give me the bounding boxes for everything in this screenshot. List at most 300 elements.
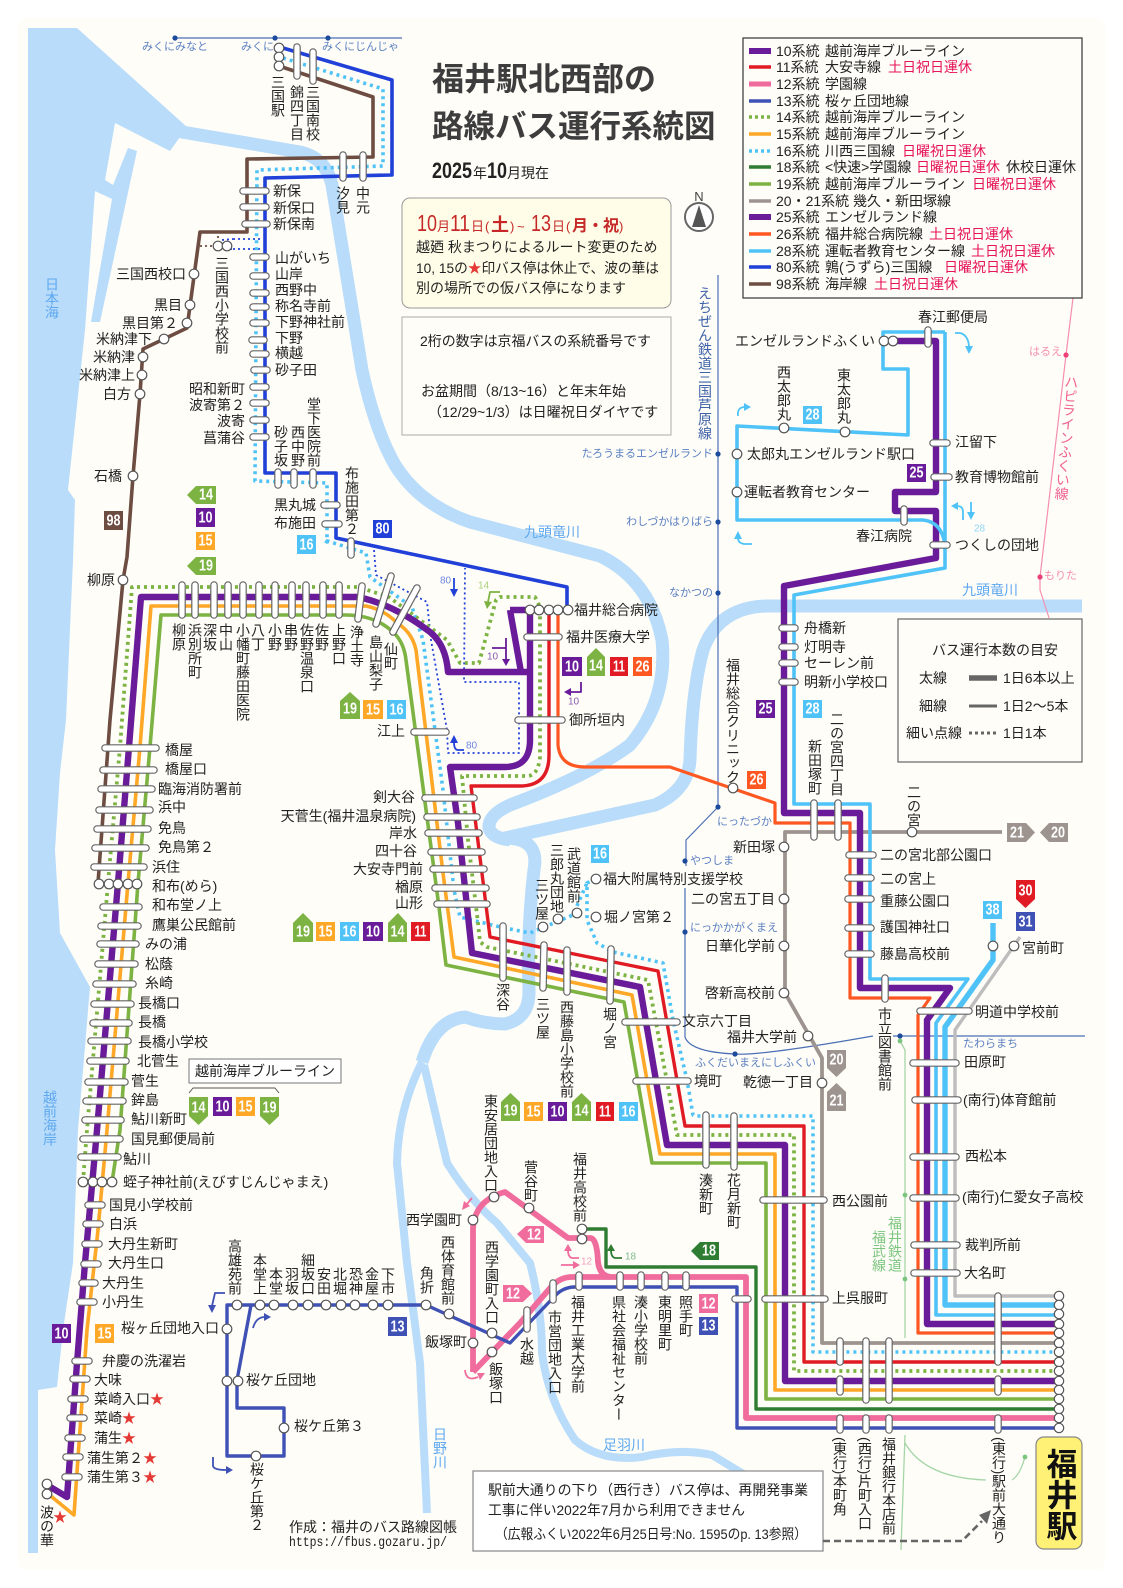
- route 80 dotted branches: [222, 239, 519, 753]
- stop labels: west coast corridor: 橋屋: [165, 742, 193, 758]
- route badges: north and coast: 10: [54, 1326, 69, 1342]
- legend: route list: <快速>学園線: [825, 159, 911, 175]
- stop labels: Sakuragaoka line 13: 県社会福祉センター: [611, 1295, 627, 1421]
- stop labels: Harue and Angel Land area: 新田塚町: [807, 739, 823, 795]
- date: as of October 2025: 2025: [432, 158, 472, 183]
- legend: route list: 80系統: [776, 259, 820, 275]
- stop labels: Sakuragaoka line 13: 桜ヶ丘団地入口: [121, 1320, 219, 1336]
- route badges: east side: 21: [1010, 824, 1024, 842]
- stop labels: Mikuni and Shinbo area: 新保口: [273, 200, 315, 216]
- stop labels: west coast corridor: 菜崎入口★: [94, 1391, 164, 1407]
- stop labels: west coast corridor: 蒲生第３★: [87, 1469, 157, 1485]
- route 16 dotted: [255, 58, 1055, 1352]
- stop labels: Mikuni and Shinbo area: 山がいち: [275, 250, 331, 266]
- stop labels: east corridor to Fukui Station: 西松本: [965, 1148, 1007, 1164]
- date: as of October 2025: [432, 158, 549, 183]
- stop labels: Mikuni and Shinbo area: 山岸: [275, 266, 303, 282]
- stop labels: Mikuni and Shinbo area: 黒目第２: [122, 315, 178, 331]
- stop labels: Sakuragaoka line 13: 東安居団地入口: [483, 1094, 499, 1192]
- route badges: north and coast: 15: [98, 1326, 112, 1342]
- stop labels: east corridor to Fukui Station: 大名町: [964, 1265, 1006, 1281]
- stop labels: west coast corridor: 鮎川新町: [131, 1111, 187, 1127]
- stop labels: east corridor to Fukui Station: 新田塚: [733, 839, 775, 855]
- stop labels: west coast corridor: 蒲生第２★: [87, 1450, 157, 1466]
- notice panel: route change October 11-13: ): [510, 219, 514, 234]
- route badges: Eshima corridor clusters: [293, 648, 652, 942]
- stop labels: top horizontal corridor: [171, 602, 658, 911]
- stop labels: Mikuni and Shinbo area: 波寄: [217, 413, 245, 429]
- callout: Echizen Coast Blue Line: 10: [216, 1098, 230, 1116]
- railway: Echizen Mikuni-Awara line: にったづか: [717, 815, 772, 828]
- legend: service frequency: バス運行本数の目安: [932, 642, 1058, 658]
- route badges: Eshima corridor clusters: 14: [390, 924, 405, 940]
- stop labels: Sakuragaoka line 13: 湊小学校前: [633, 1295, 649, 1366]
- route badges: center and south: 12: [702, 1296, 716, 1312]
- stop labels: Harue and Angel Land area: 福井総合クリニック: [725, 658, 741, 784]
- stop labels: east corridor to Fukui Station: 重藤公園口: [880, 893, 950, 909]
- river and sea names: 日野川: [432, 1427, 448, 1469]
- stop labels: central corridor: 堀ノ宮: [602, 1007, 618, 1049]
- route badges: center and south: 16: [593, 846, 607, 862]
- stop labels: east corridor to Fukui Station: (南行)体育館前: [963, 1092, 1056, 1108]
- callout: Echizen Coast Blue Line: 15: [238, 1098, 253, 1116]
- stop labels: Harue and Angel Land area: 西太郎丸: [776, 365, 792, 422]
- route badges: center and south: 12: [506, 1286, 520, 1302]
- stop labels: top horizontal corridor: 八丁: [250, 623, 266, 651]
- stop labels: Sakuragaoka line 13: 福井工業大学前: [570, 1295, 586, 1394]
- stop labels: Harue and Angel Land area: つくしの団地: [955, 537, 1039, 553]
- stop labels: Sakuragaoka line 13: 恐神: [348, 1267, 364, 1295]
- route badges: center and south: 10: [550, 1104, 565, 1120]
- legend: route list: 休校日運休: [1006, 159, 1076, 175]
- route badges: east side: 25: [910, 464, 924, 482]
- stop labels: Mikuni and Shinbo area: 柳原: [87, 572, 115, 588]
- stop labels: west coast corridor: 小丹生: [102, 1294, 144, 1310]
- stop labels: central corridor: [495, 843, 888, 1306]
- railway: Hapi-line Fukui: ハピラインふくい線: [1053, 374, 1080, 502]
- stop labels: Mikuni and Shinbo area: 三国駅: [270, 75, 286, 117]
- stop labels: Sakuragaoka line 13: 市営団地入口: [547, 1310, 563, 1394]
- stop labels: Harue and Angel Land area: 教育博物館前: [955, 469, 1039, 485]
- route badges: Eshima corridor clusters: 14: [589, 658, 603, 674]
- legend: service frequency: 1日6本以上: [1003, 670, 1075, 686]
- stop labels: west coast corridor: 大丹生新町: [108, 1236, 178, 1252]
- stop labels: west coast corridor: 免鳥: [158, 820, 186, 836]
- route badges: center and south: 12: [527, 1226, 541, 1244]
- route badges: Eshima corridor clusters: 16: [390, 702, 404, 718]
- legend: route list: 越前海岸ブルーライン: [825, 126, 965, 142]
- title: 福井駅北西部の: [432, 61, 656, 97]
- Fukui Station box: [1036, 1437, 1082, 1549]
- stop labels: west coast corridor: 蒲生★: [94, 1430, 136, 1446]
- stop labels: central corridor: 深谷: [495, 983, 511, 1011]
- date: as of October 2025: 年: [473, 165, 487, 181]
- route badges: center and south: 11: [599, 1104, 611, 1120]
- notice panel: route change October 11-13: 土: [491, 215, 509, 235]
- railway: Fukui Railway Fukubu line: 福井鉄道: [887, 1216, 903, 1273]
- credit: [289, 1519, 457, 1551]
- stop labels: west coast corridor: 国見小学校前: [109, 1197, 193, 1213]
- legend: route list: 26系統: [776, 226, 820, 242]
- notice panel: route change October 11-13: ): [619, 219, 623, 234]
- stop labels: Sakuragaoka line 13: 本堂: [268, 1267, 284, 1295]
- Fukui Station box: 福井駅: [1042, 1448, 1077, 1541]
- legend: route list: 16系統: [776, 143, 820, 159]
- route badges: east side: 30: [1018, 882, 1033, 900]
- stop labels: top horizontal corridor: 仙町: [383, 642, 399, 670]
- stop labels: east corridor to Fukui Station: 啓新高校前: [705, 985, 775, 1001]
- stop labels: Harue and Angel Land area: 春江病院: [856, 528, 912, 544]
- stop labels: west coast corridor: 長橋小学校: [138, 1034, 208, 1050]
- stop labels: Mikuni and Shinbo area: 布施田第２: [344, 466, 360, 536]
- stop labels: west coast corridor: 和布堂ノ上: [152, 897, 222, 913]
- stop labels: Mikuni and Shinbo area: 黒丸城: [274, 497, 316, 513]
- stop labels: top horizontal corridor: 四十谷: [375, 843, 417, 859]
- stop labels: Harue and Angel Land area: 明新小学校口: [804, 674, 888, 690]
- stop labels: top horizontal corridor: 小野: [267, 623, 283, 651]
- railway: Echizen Mikuni-Awara line: なかつの: [669, 586, 713, 599]
- stop labels: east corridor to Fukui Station: 田原町: [964, 1054, 1006, 1070]
- stop labels: Sakuragaoka line 13: 安田: [316, 1267, 332, 1295]
- route badges: Eshima corridor clusters: 11: [613, 658, 625, 676]
- legend: route list: 15系統: [776, 126, 820, 142]
- railway: Echizen Mikuni-Awara line: たわらまち: [963, 1037, 1018, 1050]
- route badges: east side: 25: [758, 700, 773, 718]
- legend: route list: 20・21系統: [776, 193, 849, 209]
- route badges: east side: 31: [1018, 914, 1033, 930]
- legend: service frequency: 細い点線: [906, 725, 962, 741]
- direction arrows: 14: [478, 580, 490, 592]
- legend: route list: エンゼルランド線: [825, 209, 937, 225]
- notice panel: route change October 11-13: 別の場所での仮バス停になります: [416, 280, 626, 296]
- stop labels: top horizontal corridor: 佐野: [314, 623, 330, 651]
- route badges: Eshima corridor clusters: 10: [366, 924, 380, 940]
- stop labels: west coast corridor: みの浦: [145, 936, 187, 952]
- stop labels: Sakuragaoka line 13: 飯塚町: [425, 1334, 467, 1350]
- stop labels: east corridor to Fukui Station: 明道中学校前: [975, 1004, 1059, 1020]
- stop labels: Mikuni and Shinbo area: 西野中: [275, 282, 317, 298]
- river and sea names: 九頭竜川: [524, 524, 580, 540]
- stop labels: Sakuragaoka line 13: 西体育館前: [440, 1235, 456, 1306]
- stop labels: top horizontal corridor: 山形: [395, 895, 423, 911]
- stop labels: Sakuragaoka line 13: 本堂上: [252, 1253, 268, 1295]
- river and sea names: 足羽川: [603, 1437, 645, 1453]
- stop labels: west coast corridor: 鉾島: [131, 1092, 159, 1108]
- arrow: dashed pointer to Ekimae-odori: [823, 1510, 991, 1541]
- stop labels: Harue and Angel Land area: 二の宮四丁目: [829, 712, 845, 796]
- legend: route list: 幾久・新田塚線: [853, 193, 951, 209]
- route badges: north and coast: 98: [106, 512, 121, 530]
- route 26 orange-red: [558, 610, 1055, 1333]
- route badges: north and coast: 80: [376, 520, 390, 538]
- stop labels: east corridor to Fukui Station: 藤島高校前: [880, 946, 950, 962]
- stop labels: Sakuragaoka line 13: 桜ケ丘団地: [246, 1372, 316, 1388]
- stop labels: Harue and Angel Land area: 灯明寺: [804, 639, 846, 655]
- legend: route list: 越前海岸ブルーライン: [825, 43, 965, 59]
- stop labels: east corridor to Fukui Station: 護国神社口: [880, 919, 950, 935]
- stop labels: top horizontal corridor: 浄土寺: [349, 625, 365, 667]
- stop labels: Sakuragaoka line 13: 細坂口: [300, 1253, 316, 1295]
- notice panel: route change October 11-13: 10: [417, 210, 437, 236]
- route badges: north and coast: [52, 486, 392, 1343]
- stop labels: Sakuragaoka line 13: 金屋: [364, 1267, 380, 1296]
- route badges: Eshima corridor clusters: 15: [318, 924, 333, 940]
- stop labels: east corridor to Fukui Station: 福井銀行本店前: [881, 1437, 897, 1536]
- stop labels: west coast corridor: ★: [53, 1509, 67, 1525]
- route 13 indigo: [227, 1287, 1055, 1456]
- legend: route list: 学園線: [825, 76, 867, 92]
- route badges: north and coast: 16: [300, 536, 314, 554]
- stop labels: central corridor: 西藤島小学校前: [559, 1000, 575, 1099]
- legend: route list: 土日祝日運休: [874, 276, 958, 292]
- stop labels: top horizontal corridor: 浜別所町: [187, 623, 203, 679]
- stop labels: top horizontal corridor: 佐野温泉口: [299, 623, 315, 693]
- stop labels: Mikuni and Shinbo area: 石橋: [94, 468, 122, 484]
- stop labels: Sakuragaoka line 13: 西学園町入口: [484, 1240, 500, 1324]
- route badges: center and south: 19: [504, 1102, 518, 1120]
- legend: route list: 14系統: [776, 109, 820, 125]
- credit: https://fbus.gozaru.jp/: [289, 1535, 447, 1551]
- stop labels: Mikuni and Shinbo area: 錦四丁目: [289, 84, 305, 141]
- stop labels: Harue and Angel Land area: 江留下: [955, 434, 997, 450]
- railway: Echizen Mikuni-Awara line: みくにみなと: [142, 40, 208, 53]
- railway: Hapi-line Fukui: もりた: [1044, 569, 1077, 582]
- legend: route list: 運転者教育センター線: [825, 243, 965, 259]
- railway: Echizen Mikuni-Awara line: えちぜん鉄道三国芦原線: [697, 286, 713, 440]
- direction arrows: 80: [466, 740, 478, 752]
- stop labels: Mikuni and Shinbo area: 米納津上: [79, 367, 135, 383]
- stop labels: east corridor to Fukui Station: 日華化学前: [705, 938, 775, 954]
- notice panel: route change October 11-13: 10, 15の★印バス停は休止で、波の華は: [416, 260, 659, 276]
- legend: service frequency: 太線: [919, 670, 947, 686]
- stop labels: Mikuni and Shinbo area: 黒目: [154, 297, 182, 313]
- callout: Echizen Coast Blue Line: 19: [262, 1100, 277, 1116]
- railway: Fukui Railway Fukubu line: 福武線: [871, 1230, 887, 1272]
- route badges: east side: 20: [1051, 824, 1065, 842]
- legend: route list: 10系統: [776, 43, 820, 59]
- stop labels: west coast corridor: 浜住: [152, 859, 180, 875]
- date: as of October 2025: 10: [487, 158, 507, 183]
- river and sea names: 越前海岸: [42, 1090, 58, 1146]
- stop labels: east corridor to Fukui Station: 二の宮上: [880, 871, 936, 887]
- stop labels: Mikuni and Shinbo area: 下野神社前: [275, 314, 345, 330]
- stop labels: Mikuni and Shinbo area: 布施田: [274, 515, 316, 531]
- legend: route list: [743, 38, 1082, 298]
- route badges: east side: 20: [830, 1052, 844, 1068]
- route badges: Eshima corridor clusters: 15: [366, 702, 380, 718]
- date: as of October 2025: 月現在: [507, 165, 549, 181]
- route badges: center and south: 18: [702, 1242, 716, 1260]
- stop labels: west coast corridor: 菅生: [131, 1073, 159, 1089]
- stop labels: Mikuni and Shinbo area: 横越: [275, 345, 303, 361]
- stop labels: top horizontal corridor: 串野: [283, 623, 299, 651]
- stop labels: Harue and Angel Land area: 春江郵便局: [918, 309, 988, 325]
- stop labels: Sakuragaoka line 13: 桜ケ丘第２: [249, 1462, 265, 1532]
- stop labels: top horizontal corridor: 御所垣内: [569, 712, 625, 728]
- stop labels: top horizontal corridor: 島山梨子: [368, 635, 384, 692]
- direction arrows: [208, 333, 986, 1474]
- stop labels: Mikuni and Shinbo area: 三国西校口: [116, 266, 186, 282]
- route 28 light blue: [737, 332, 1055, 1315]
- route badges: east side: 38: [986, 902, 1000, 918]
- route badges: Eshima corridor clusters: 11: [414, 924, 427, 940]
- railway: Echizen Mikuni-Awara line: わしづかはりばら: [626, 515, 713, 528]
- legend: route list: 鶉(うずら)三国線: [825, 259, 932, 275]
- callout: Echizen Coast Blue Line: 14: [192, 1100, 206, 1116]
- legend: route list: 13系統: [776, 93, 820, 109]
- notice panel: route change October 11-13: 月・祝: [572, 217, 619, 235]
- route 31 light gray: [955, 937, 1055, 1296]
- railway: Echizen Mikuni-Awara line: [142, 35, 1085, 1069]
- stop labels: Sakuragaoka line 13: 桜ケ丘第３: [294, 1418, 364, 1434]
- stop labels: west coast corridor: 波の華: [39, 1505, 55, 1547]
- river and sea names: [42, 277, 1018, 1469]
- route badges: center and south: [388, 845, 719, 1336]
- route badges: north and coast: 10: [198, 510, 213, 526]
- route badges: Eshima corridor clusters: 10: [565, 658, 579, 676]
- notice panel: Ekimae-odori stop closure: [473, 1471, 823, 1551]
- notice panel: route change October 11-13: 月: [437, 219, 450, 234]
- stop labels: Mikuni and Shinbo area: 砂子田: [275, 362, 317, 378]
- stop labels: west coast corridor: 蛭子神社前(えびすじんじゃまえ): [123, 1174, 328, 1190]
- legend: route list: 桜ヶ丘団地線: [825, 93, 909, 109]
- stop labels: top horizontal corridor: 天菅生(福井温泉病院): [281, 808, 416, 824]
- stop labels: Sakuragaoka line 13: 下市: [380, 1267, 396, 1295]
- legend: service frequency: 細線: [919, 698, 947, 714]
- notice panel: Ekimae-odori stop closure: 駅前大通りの下り（西行き）バス停は、再開発事業: [488, 1482, 808, 1498]
- legend: route list: 川西三国線: [825, 143, 895, 159]
- route 12 pink: [473, 1192, 1055, 1418]
- route 14 dotted green: [83, 587, 1055, 1371]
- stop labels: central corridor: 三郎丸団地: [549, 843, 565, 913]
- notice panel: route change October 11-13: 日: [471, 219, 484, 234]
- notice panel: Ekimae-odori stop closure: （広報ふくい2022年6月25日号:No. 1595のp. 13参照）: [495, 1526, 807, 1542]
- stop labels: east corridor to Fukui Station: 二の宮北部公園口: [880, 847, 992, 863]
- legend: route list: 海岸線: [825, 276, 867, 292]
- stop labels: east corridor to Fukui Station: 裁判所前: [965, 1237, 1021, 1253]
- stop labels: west coast corridor: 菜崎★: [94, 1410, 136, 1426]
- notice panel: route change October 11-13: 越廼 秋まつりによるルート変更のため: [416, 239, 657, 255]
- legend: route list: 12系統: [776, 76, 820, 92]
- stop labels: Sakuragaoka line 13: 西学園町: [406, 1212, 462, 1228]
- stop labels: Mikuni and Shinbo area: 白方: [103, 386, 131, 402]
- legend: route list: 19系統: [776, 176, 820, 192]
- stop labels: central corridor: 武道館前: [566, 847, 582, 904]
- route badges: east side: [747, 406, 1068, 1111]
- stop labels: central corridor: 西公園前: [832, 1193, 888, 1209]
- stop labels: Sakuragaoka line 13: 羽坂: [284, 1267, 300, 1295]
- stop labels: Mikuni and Shinbo area: 称名寺前: [275, 298, 331, 314]
- railway: Hapi-line Fukui: [1029, 298, 1080, 618]
- stop labels: top horizontal corridor: 剣大谷: [373, 789, 415, 805]
- stop labels: Harue and Angel Land area: 舟橋新: [804, 620, 846, 636]
- direction arrows: 10: [568, 696, 580, 708]
- stop labels: Mikuni and Shinbo area: 堂下医院前: [306, 397, 322, 468]
- stop labels: west coast corridor: 浜中: [158, 799, 186, 815]
- stop labels: central corridor: 三ツ屋: [534, 878, 550, 921]
- route badges: center and south: 16: [622, 1104, 636, 1120]
- legend: route list: 28系統: [776, 243, 820, 259]
- stop labels: east corridor to Fukui Station: 乾徳一丁目: [743, 1074, 813, 1090]
- route badges: north and coast: 14: [199, 486, 213, 504]
- stop labels: Harue and Angel Land area: 太郎丸エンゼルランド駅口: [747, 446, 915, 462]
- stop labels: west coast corridor: 免鳥第２: [158, 839, 214, 855]
- notice panel: route numbers and holiday schedule: お盆期間（8/13~16）と年末年始: [421, 383, 626, 399]
- stop labels: Sakuragaoka line 13: 高雄苑前: [227, 1238, 243, 1296]
- stop labels: Sakuragaoka line 13: 東明里町: [657, 1295, 673, 1351]
- route 11 red: [471, 610, 1055, 1362]
- stop labels: top horizontal corridor: 中山: [218, 623, 234, 651]
- legend: service frequency: 1日1本: [1003, 725, 1047, 741]
- stop labels: Mikuni and Shinbo area: [79, 75, 371, 588]
- route badges: center and south: 13: [390, 1318, 405, 1336]
- railway: Echizen Mikuni-Awara line: やつしま: [690, 854, 734, 867]
- legend: route list: 18系統: [776, 159, 820, 175]
- stop labels: west coast corridor: 大丹生: [102, 1275, 144, 1291]
- stop labels: Sakuragaoka line 13: 福井高校前: [572, 1152, 588, 1223]
- stop labels: west coast corridor: [39, 742, 328, 1547]
- stop labels: Sakuragaoka line 13: 飯塚口: [488, 1362, 504, 1404]
- route badges: Eshima corridor clusters: 16: [342, 924, 357, 940]
- notice panel: route change October 11-13: 13: [531, 210, 551, 236]
- route badges: east side: 28: [806, 700, 820, 718]
- stop labels: west coast corridor: 大味: [94, 1372, 122, 1388]
- callout: Echizen Coast Blue Line: 越前海岸ブルーライン: [195, 1063, 335, 1079]
- stop labels: Mikuni and Shinbo area: 昭和新町: [189, 381, 245, 397]
- direction arrows: 12: [581, 1256, 593, 1268]
- stop labels: west coast corridor: 白浜: [109, 1216, 137, 1232]
- route badges: Eshima corridor clusters: 26: [636, 658, 650, 676]
- stop labels: top horizontal corridor: 福井医療大学: [566, 629, 650, 645]
- stop labels: Mikuni and Shinbo area: 新保南: [273, 216, 315, 232]
- legend: route list: 福井総合病院線: [825, 226, 923, 242]
- legend: route list: 土日祝日運休: [929, 226, 1013, 242]
- river and sea names: 日本海: [44, 277, 60, 319]
- railway: Echizen Mikuni-Awara line: みくに: [241, 40, 274, 53]
- stop labels: Sakuragaoka line 13: 角折: [419, 1266, 435, 1294]
- stop labels: Sakuragaoka line 13: 水越: [519, 1337, 535, 1365]
- stop labels: top horizontal corridor: 江上: [377, 723, 405, 739]
- route badges: Eshima corridor clusters: 19: [343, 700, 357, 718]
- stop labels: Harue and Angel Land area: [725, 309, 1039, 827]
- legend: service frequency: [898, 619, 1082, 762]
- stop labels: central corridor: 湊新町: [698, 1173, 714, 1215]
- direction arrows: 80: [440, 576, 452, 586]
- direction arrows: 28: [974, 524, 986, 534]
- route 10 purple: [47, 597, 1055, 1497]
- stop labels: Mikuni and Shinbo area: 菖蒲谷: [203, 430, 245, 446]
- notice panel: route change October 11-13: ~: [517, 219, 525, 234]
- railway: Echizen Mikuni-Awara line: ふくだいまえにしふくい: [695, 1056, 816, 1069]
- stop labels: west coast corridor: 鮎川: [123, 1151, 151, 1167]
- stop labels: Mikuni and Shinbo area: 砂子坂: [273, 425, 289, 467]
- route 25 purple: [784, 341, 1055, 1324]
- stop labels: Mikuni and Shinbo area: 汐見: [335, 186, 351, 215]
- stop labels: west coast corridor: 鷹巣公民館前: [152, 917, 236, 933]
- stop labels: Mikuni and Shinbo area: 三国西小学校前: [214, 256, 230, 355]
- notice panel: route change October 11-13: (: [485, 219, 490, 234]
- stop labels: top horizontal corridor: 楢原: [395, 879, 423, 895]
- route badges: east side: 28: [806, 406, 820, 424]
- route 18 dark green: [581, 1229, 1055, 1409]
- legend: route list: 日曜祝日運休: [916, 159, 1000, 175]
- stop labels: central corridor: 花月新町: [726, 1173, 742, 1229]
- stop labels: top horizontal corridor: 深坂: [202, 623, 218, 651]
- stop labels: Sakuragaoka line 13: [121, 1094, 694, 1532]
- stop labels: west coast corridor: 和布(めら): [152, 878, 217, 894]
- stop labels: Sakuragaoka line 13: 照手町: [678, 1295, 694, 1337]
- stop labels: Mikuni and Shinbo area: 米納津下: [96, 331, 152, 347]
